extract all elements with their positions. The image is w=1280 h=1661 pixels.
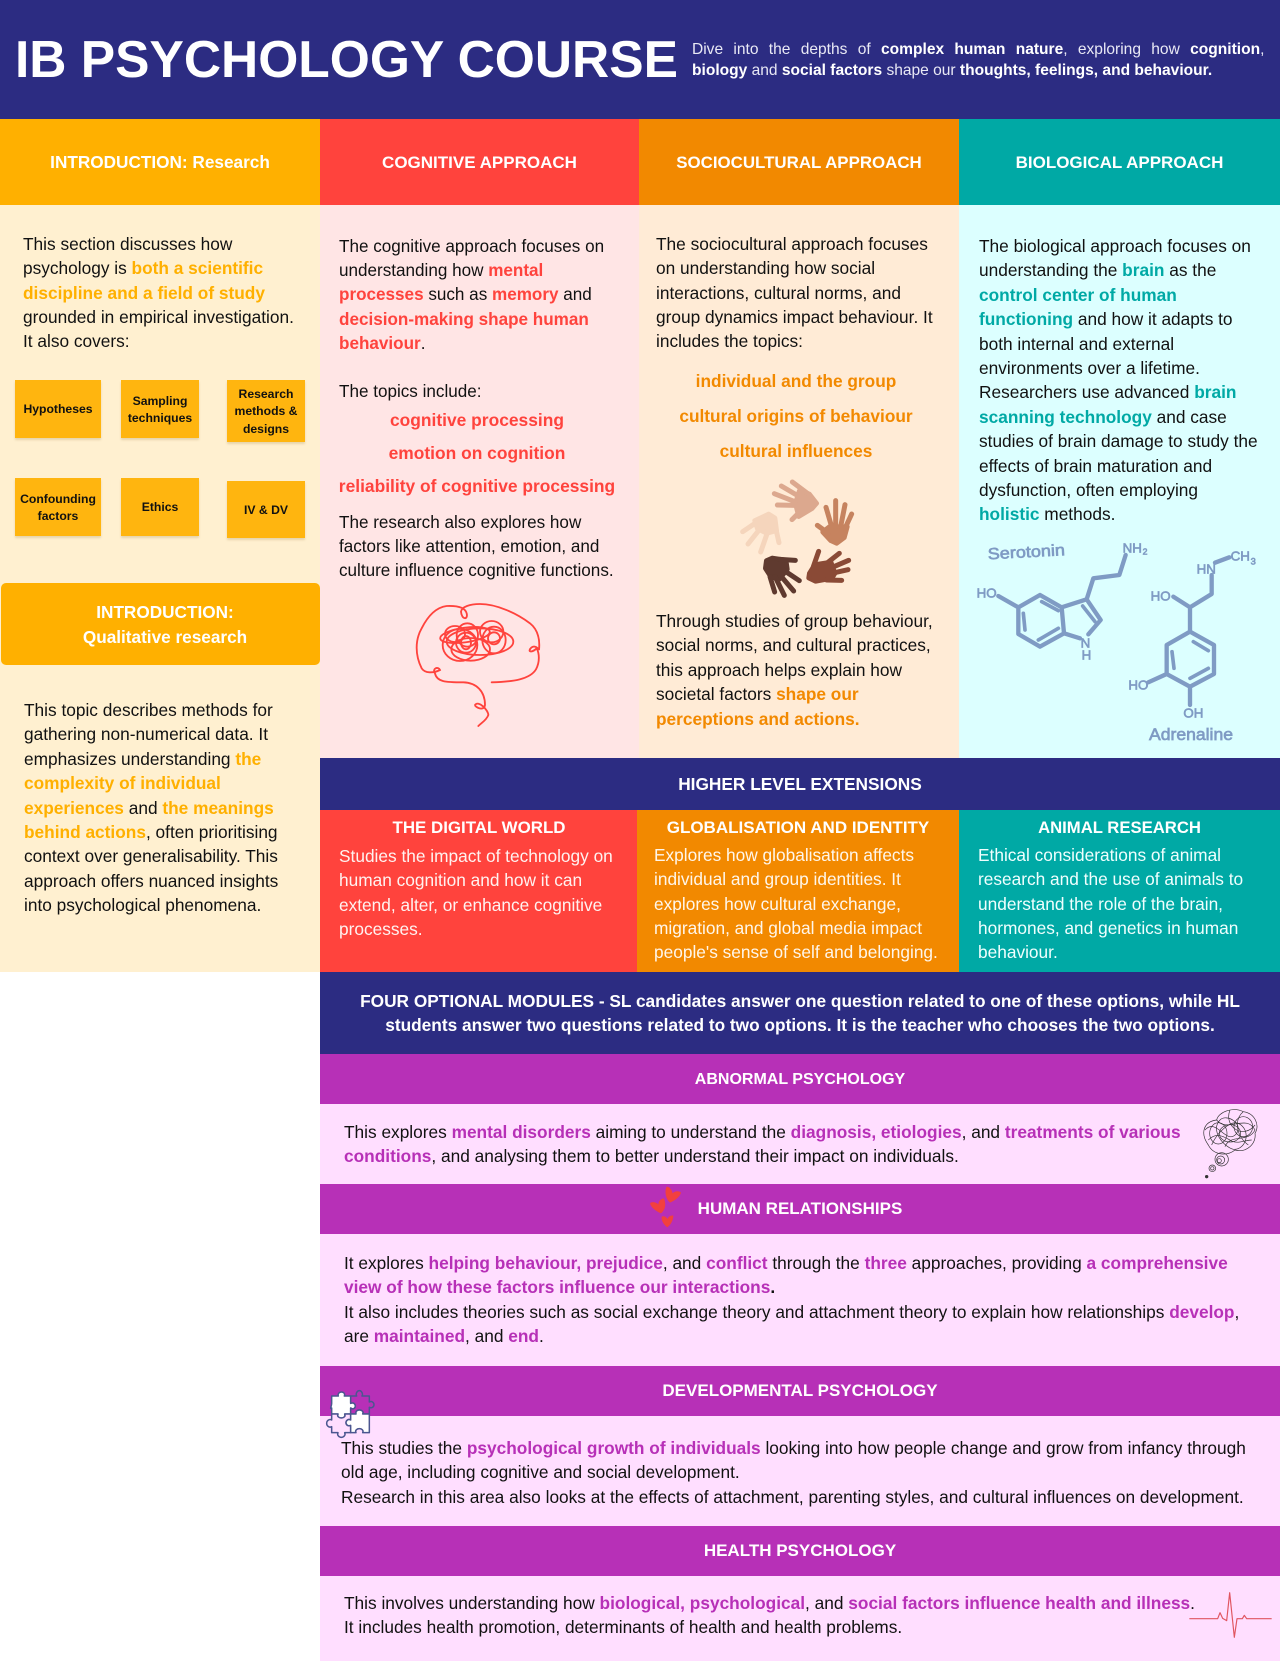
text: sociocultural closing: perceptions and actions.: [656, 709, 860, 729]
text: research intro: [23, 234, 294, 351]
heading: cognitive approach: COGNITIVE APPROACH: [382, 152, 577, 172]
panel: abnormal psychology: [320, 1104, 1280, 1184]
subtitle: biology and social factors shape our thoughts, feelings, and behaviour.: [692, 62, 1212, 79]
heading: health psychology: HEALTH PSYCHOLOGY: [704, 1540, 896, 1560]
text: animal research: hormones, and genetics in human: [978, 918, 1238, 938]
heading: introduction research: INTRODUCTION: Research: [50, 152, 270, 172]
text: health: This involves understanding how biological, psychological, and social factors influence health and illness.: [344, 1593, 1195, 1613]
banner: four optional modules: FOUR OPTIONAL MODULES - SL candidates answer one question related to one of these options, while HL: [360, 991, 1240, 1011]
text: sociocultural intro: [656, 234, 933, 351]
text: research intro: grounded in empirical investigation.: [23, 307, 294, 327]
text: human relationships: It explores helping behaviour, prejudice, and conflict through the three approaches, providing a comprehensive: [344, 1253, 1228, 1273]
note: sampling techniques: Sampling: [133, 394, 187, 408]
heading: biological approach: [959, 119, 1280, 205]
text: qualitative description: emphasizes understanding the: [24, 749, 261, 769]
text: biological description: studies of brain damage to study the: [979, 431, 1258, 451]
icon: serotonin and adrenaline molecules: 2: [1143, 547, 1148, 557]
heading: qualitative research: INTRODUCTION:: [96, 602, 234, 622]
heading: higher level extensions: [320, 758, 1280, 810]
text: sociocultural topics: cultural influences: [720, 441, 872, 461]
note: IV and DV: [227, 481, 305, 538]
text: cognitive research: factors like attention, emotion, and: [339, 537, 599, 556]
icon: serotonin and adrenaline molecules: HO: [977, 586, 997, 601]
text: digital world: extend, alter, or enhance cognitive: [339, 895, 602, 915]
panel: animal research: [959, 810, 1280, 972]
text: qualitative description: complexity of individual: [24, 773, 221, 793]
heading: higher level extensions: HIGHER LEVEL EXTENSIONS: [678, 774, 922, 794]
heading: animal research: ANIMAL RESEARCH: [1038, 818, 1201, 837]
text: developmental: Research in this area also looks at the effects of attachment, parenting styles, and cultural influences on development.: [341, 1487, 1244, 1507]
text: digital world: processes.: [339, 919, 423, 939]
text: human relationships: [344, 1253, 1239, 1346]
panel: globalisation and identity: [637, 810, 959, 972]
text: sociocultural intro: includes the topics:: [656, 331, 803, 351]
text: cognitive intro: decision-making shape human: [339, 310, 589, 329]
text: biological description: The biological approach focuses on: [979, 236, 1251, 256]
text: digital world: human cognition and how it can: [339, 870, 582, 890]
text: qualitative description: behind actions, often prioritising: [24, 822, 278, 842]
note: research methods: Research: [239, 387, 293, 401]
icon: heartbeat line: [1189, 1592, 1272, 1638]
icon: scribble brain: [416, 603, 540, 727]
text: abnormal: This explores mental disorders aiming to understand the diagnosis, etiologies, and treatments of various: [344, 1122, 1181, 1142]
text: cognitive topics: cognitive processing: [390, 410, 564, 430]
note: confounding factors: [15, 478, 101, 536]
text: biological description: both internal and external: [979, 334, 1174, 354]
heading: cognitive approach: [320, 119, 639, 205]
text: developmental: old age, including cognitive and social development.: [341, 1462, 740, 1482]
icon: hearts: [650, 1186, 681, 1228]
text: research intro: discipline and a field of study: [23, 283, 265, 303]
text: cognitive intro: behaviour.: [339, 334, 425, 353]
note: confounding factors: factors: [38, 509, 78, 523]
banner: four optional modules: [320, 972, 1280, 1054]
text: human relationships: It also includes theories such as social exchange theory and attachment theory to explain how relationships develop,: [344, 1302, 1239, 1322]
text: biological description: holistic methods.: [979, 504, 1115, 524]
heading: biological approach: BIOLOGICAL APPROACH: [1016, 152, 1223, 172]
text: biological description: Researchers use advanced brain: [979, 382, 1236, 402]
text: animal research: understand the role of the brain,: [978, 894, 1223, 914]
text: animal research: research and the use of animals to: [978, 869, 1243, 889]
icon: serotonin and adrenaline molecules: Serotonin: [987, 542, 1065, 563]
heading: health psychology: [320, 1526, 1280, 1576]
text: digital world: Studies the impact of technology on: [339, 846, 613, 866]
heading: qualitative research: Qualitative research: [83, 626, 247, 646]
heading: digital world: THE DIGITAL WORLD: [393, 818, 565, 837]
text: globalisation: migration, and global media impact: [654, 918, 922, 938]
note: sampling techniques: techniques: [128, 411, 192, 425]
heading: introduction research: [0, 119, 320, 205]
text: human relationships: are maintained, and end.: [344, 1326, 544, 1346]
icon: serotonin and adrenaline molecules: 3: [1251, 557, 1256, 567]
subtitle: [692, 41, 1264, 79]
panel: introduction: [0, 205, 320, 972]
text: topics label: The topics include:: [339, 382, 482, 401]
text: cognitive research: culture influence cognitive functions.: [339, 561, 614, 580]
text: abnormal: [344, 1122, 1181, 1166]
text: qualitative description: [24, 700, 278, 915]
text: cognitive research: The research also explores how: [339, 513, 581, 532]
note: IV and DV: IV & DV: [244, 503, 288, 517]
text: globalisation: people's sense of self and belonging.: [654, 942, 938, 962]
text: cognitive intro: processes such as memory and: [339, 285, 592, 304]
panel: developmental psychology: [320, 1416, 1280, 1526]
heading: globalisation: GLOBALISATION AND IDENTITY: [667, 818, 929, 837]
text: research intro: It also covers:: [23, 331, 130, 351]
text: health: It includes health promotion, determinants of health and health problems.: [344, 1617, 902, 1637]
icon: serotonin and adrenaline molecules: NH: [1123, 540, 1142, 555]
panel: sociocultural: [639, 205, 959, 758]
text: sociocultural closing: [656, 611, 933, 729]
text: qualitative description: gathering non-numerical data. It: [24, 724, 268, 744]
note: research methods: designs: [243, 422, 289, 436]
text: biological description: understanding the brain as the: [979, 260, 1216, 280]
text: biological description: dysfunction, often employing: [979, 480, 1198, 500]
heading: developmental psychology: DEVELOPMENTAL PSYCHOLOGY: [662, 1380, 938, 1400]
heading: qualitative research: [1, 583, 320, 665]
text: sociocultural topics: [679, 371, 913, 461]
note: hypotheses: [15, 380, 101, 438]
icon: serotonin and adrenaline molecules: [977, 540, 1256, 744]
text: sociocultural intro: group dynamics impact behaviour. It: [656, 307, 933, 327]
icon: serotonin and adrenaline molecules: H: [1082, 647, 1091, 662]
text: sociocultural topics: individual and the group: [696, 371, 896, 391]
text: biological description: environments over a lifetime.: [979, 358, 1200, 378]
text: developmental: This studies the psychological growth of individuals looking into how people change and grow from infancy through: [341, 1438, 1246, 1458]
icon: puzzle pieces: [326, 1390, 375, 1438]
icon: serotonin and adrenaline molecules: HO: [1151, 589, 1171, 604]
heading: sociocultural approach: SOCIOCULTURAL APPROACH: [676, 152, 922, 172]
text: qualitative description: approach offers nuanced insights: [24, 871, 278, 891]
note: hypotheses: Hypotheses: [23, 402, 93, 416]
panel: biological: [959, 205, 1280, 758]
icon: thought cloud scribble: [1203, 1109, 1258, 1178]
text: sociocultural intro: interactions, cultural norms, and: [656, 283, 901, 303]
header banner: [0, 0, 1280, 119]
panel: the digital world: [320, 810, 637, 972]
text: animal research: [978, 845, 1243, 962]
icon: serotonin and adrenaline molecules: HO: [1128, 677, 1148, 692]
text: globalisation: individual and group identities. It: [654, 869, 901, 889]
icon: serotonin and adrenaline molecules: N: [1081, 635, 1090, 650]
heading: sociocultural approach: [639, 119, 959, 205]
heading: developmental psychology: [320, 1366, 1280, 1416]
text: cognitive topics: [339, 410, 615, 496]
heading: human relationships: HUMAN RELATIONSHIPS: [698, 1199, 902, 1218]
text: qualitative description: experiences and the meanings: [24, 798, 274, 818]
text: research intro: This section discusses how: [23, 234, 232, 254]
text: biological description: effects of brain maturation and: [979, 456, 1212, 476]
text: biological description: scanning technology and case: [979, 407, 1227, 427]
note: ethics: Ethics: [142, 500, 178, 514]
note: confounding factors: Confounding: [20, 492, 96, 506]
text: animal research: Ethical considerations of animal: [978, 845, 1221, 865]
text: sociocultural intro: The sociocultural approach focuses: [656, 234, 928, 254]
icon: serotonin and adrenaline molecules: CH: [1231, 549, 1250, 564]
text: sociocultural intro: on understanding how social: [656, 258, 875, 278]
panel: cognitive: [320, 205, 639, 758]
text: qualitative description: This topic describes methods for: [24, 700, 273, 720]
text: cognitive topics: reliability of cognitive processing: [339, 476, 615, 496]
text: qualitative description: into psychological phenomena.: [24, 895, 261, 915]
text: qualitative description: context over generalisability. This: [24, 846, 278, 866]
text: sociocultural closing: Through studies of group behaviour,: [656, 611, 933, 631]
note: research methods: methods &: [234, 404, 297, 418]
text: digital world: [339, 846, 613, 939]
panel: health psychology: [320, 1576, 1280, 1661]
text: biological description: control center of human: [979, 285, 1177, 305]
text: sociocultural closing: societal factors shape our: [656, 684, 859, 704]
text: cognitive intro: [339, 237, 604, 353]
text: health: [344, 1593, 1195, 1637]
text: sociocultural closing: social norms, and cultural practices,: [656, 635, 931, 655]
note: ethics: [121, 478, 199, 536]
panel: human relationships: [320, 1234, 1280, 1366]
note: research methods: [227, 380, 305, 442]
banner: four optional modules: students answer two questions related to two options. It is the teacher who chooses the two options.: [385, 1015, 1215, 1035]
heading: human relationships: [320, 1184, 1280, 1234]
text: globalisation: [654, 845, 938, 962]
text: biological description: functioning and how it adapts to: [979, 309, 1233, 329]
icon: serotonin and adrenaline molecules: OH: [1183, 705, 1203, 720]
heading: abnormal psychology: ABNORMAL PSYCHOLOGY: [695, 1070, 905, 1088]
text: cognitive intro: understanding how mental: [339, 261, 543, 280]
heading: abnormal psychology: [320, 1054, 1280, 1104]
text: cognitive topics: emotion on cognition: [389, 443, 565, 463]
icon: serotonin and adrenaline molecules: HN: [1197, 561, 1216, 576]
text: biological description: [979, 236, 1258, 524]
text: globalisation: explores how cultural exchange,: [654, 894, 901, 914]
note: sampling techniques: [121, 380, 199, 438]
text: abnormal: conditions, and analysing them to better understand their impact on individuals.: [344, 1146, 959, 1166]
text: developmental: [341, 1438, 1246, 1507]
text: animal research: behaviour.: [978, 942, 1058, 962]
subtitle: Dive into the depths of complex human nature, exploring how cognition,: [692, 41, 1264, 58]
text: sociocultural closing: this approach helps explain how: [656, 660, 902, 680]
text: research intro: psychology is both a scientific: [23, 258, 263, 278]
icon: serotonin and adrenaline molecules: Adrenaline: [1149, 725, 1233, 744]
text: cognitive research: [339, 513, 614, 580]
text: cognitive intro: The cognitive approach focuses on: [339, 237, 604, 256]
text: human relationships: view of how these factors influence our interactions.: [344, 1277, 775, 1297]
text: globalisation: Explores how globalisation affects: [654, 845, 914, 865]
icon: hands in a circle: [740, 480, 854, 598]
title: IB PSYCHOLOGY COURSE: [15, 30, 678, 88]
text: sociocultural topics: cultural origins of behaviour: [679, 406, 913, 426]
